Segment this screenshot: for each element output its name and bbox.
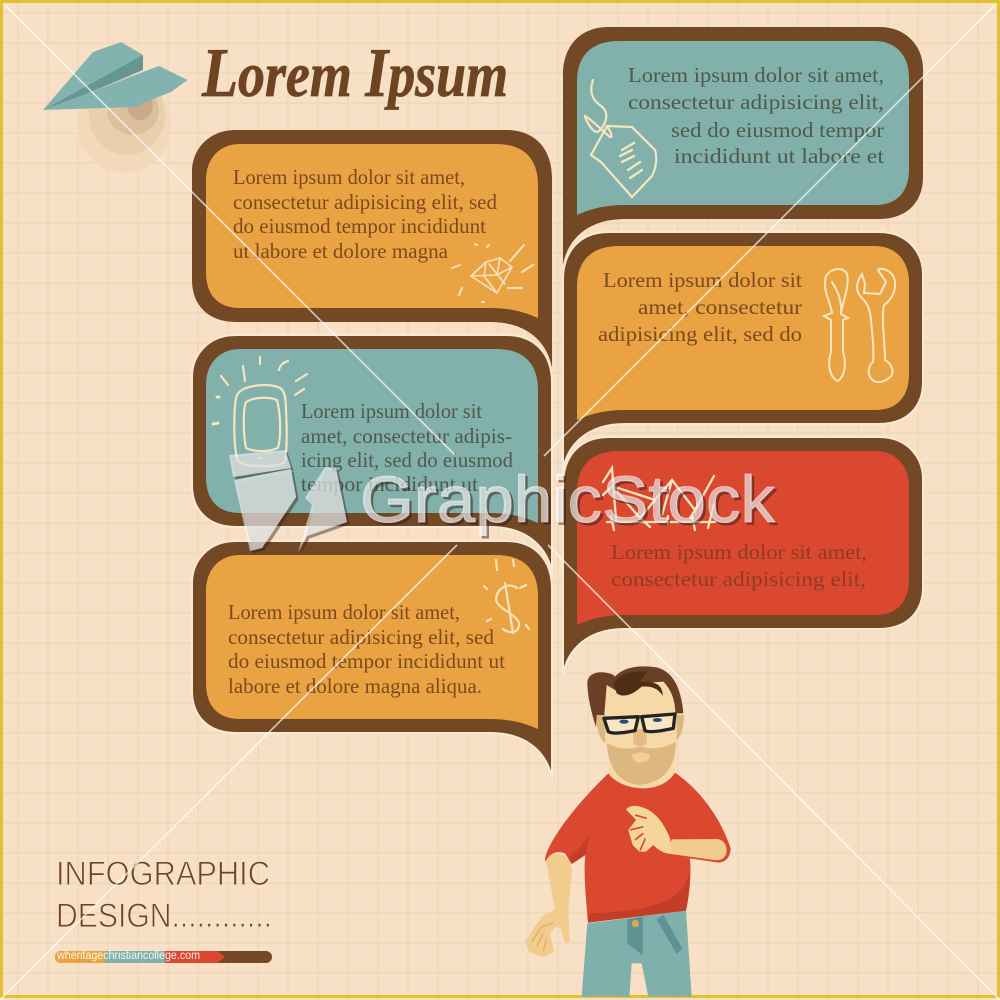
eyes (619, 718, 662, 724)
panel: bubble teal top right (563, 27, 923, 265)
plane shadow (77, 75, 171, 173)
red shirt (545, 773, 731, 923)
glasses (604, 714, 675, 733)
text block: teal top right (628, 63, 884, 168)
watermark text: GraphicStock (360, 462, 776, 536)
text block: amet, consectetur adipis- (301, 424, 512, 448)
text block (233, 165, 497, 263)
hair (587, 666, 683, 727)
text block: do eiusmod tempor incididunt ut (228, 649, 505, 673)
fly and pocket (627, 915, 682, 955)
shirt shading (569, 835, 689, 923)
text block: red bottom right: consectetur adipisicing elit, (611, 567, 866, 591)
right arm (667, 839, 727, 860)
text block (228, 600, 505, 698)
text block: teal top right: sed do eiusmod tempor (671, 118, 884, 142)
progress bar (55, 950, 272, 963)
icon: smartphone (213, 357, 307, 466)
text block: orange middle right: amet, consectetur (638, 295, 802, 319)
panel: bubble orange bottom left (192, 541, 552, 779)
panel: bubble red bottom right (563, 437, 923, 675)
character: bearded man (525, 666, 731, 997)
trousers (582, 911, 692, 997)
icon: screwdriver and wrench (824, 269, 895, 382)
icon: paper airplane (43, 42, 188, 110)
ears (595, 715, 684, 743)
icon: crown sketch (603, 468, 715, 530)
icon: diamond (452, 244, 533, 302)
text block: consectetur adipisicing elit, sed (228, 625, 494, 649)
heading: infographic design: DESIGN............ (56, 897, 272, 935)
text block: teal top right: consectetur adipisicing elit, (628, 90, 884, 114)
hand (626, 806, 672, 854)
title: Lorem Ipsum (201, 35, 508, 112)
text block: Lorem ipsum dolor sit amet, (228, 600, 460, 624)
text block: red bottom right: Lorem ipsum dolor sit amet, (611, 540, 867, 564)
text block: tempor incididunt ut (301, 472, 478, 496)
text block (301, 399, 513, 496)
text block: do eiusmod tempor incididunt (233, 214, 486, 238)
icon: dollar sign (484, 560, 529, 633)
text block: orange middle right (598, 268, 802, 346)
mouth (632, 752, 650, 763)
text block: ut labore et dolore magna (233, 239, 449, 263)
text block: labore et dolore magna aliqua. (228, 674, 482, 698)
nose (633, 728, 647, 747)
neck (608, 767, 675, 793)
text block: icing elit, sed do eiusmod (301, 448, 513, 472)
panel: bubble orange top left (192, 130, 552, 368)
hair curl (613, 671, 663, 696)
text block: orange middle right: adipisicing elit, sed do (598, 322, 802, 346)
icon: price tag (585, 80, 656, 197)
heading: infographic design (56, 855, 272, 935)
text block: consectetur adipisicing elit, sed (233, 190, 497, 214)
text block: teal top right: Lorem ipsum dolor sit amet, (628, 63, 884, 87)
text block: Lorem ipsum dolor sit amet, (233, 165, 465, 189)
panel: bubble teal middle left (192, 335, 552, 573)
beard (607, 742, 676, 785)
text block: Lorem ipsum dolor sit (301, 399, 482, 423)
panel: bubble orange middle right (563, 232, 923, 470)
heading: infographic design: INFOGRAPHIC (56, 855, 270, 893)
text block: red bottom right (611, 540, 867, 591)
text block: teal top right: incididunt ut labore et (674, 144, 884, 168)
watermark logo (229, 450, 347, 552)
face (605, 683, 677, 785)
left arm and hand (525, 854, 572, 957)
site url: wheritagechristiancollege.com (56, 950, 200, 962)
text block: orange middle right: Lorem ipsum dolor sit (603, 268, 802, 292)
